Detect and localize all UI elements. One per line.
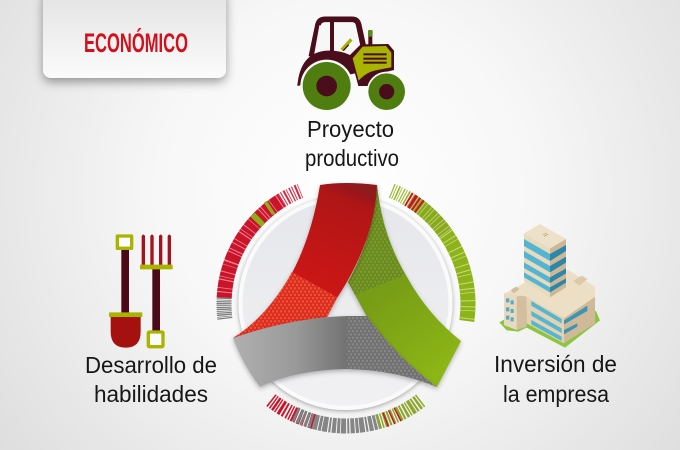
green hex section — [348, 185, 405, 295]
ribbon: gray — [233, 316, 437, 387]
label: Proyecto productivo — [305, 116, 399, 171]
gray hex section — [347, 316, 437, 387]
chart: triangular cycle — [224, 183, 468, 426]
ribbon: green — [348, 185, 461, 387]
icon: tractor — [297, 19, 407, 112]
label: Proyecto productivo: Proyecto — [307, 116, 394, 142]
label: Desarrollo de habilidades — [85, 352, 217, 407]
outer ring: gray stripes — [271, 400, 421, 426]
white disc — [240, 198, 450, 408]
heading: Económico: ECONÓMICO — [84, 27, 188, 58]
label: Inversión de la empresa: Inversión de — [494, 351, 617, 377]
label: Desarrollo de habilidades: habilidades — [94, 381, 208, 407]
icon: building — [499, 224, 600, 348]
label: Desarrollo de habilidades: Desarrollo de — [85, 352, 217, 378]
label: Proyecto productivo: productivo — [305, 145, 399, 171]
ribbon: red — [233, 183, 377, 338]
header card — [43, 0, 226, 78]
outer ring: green stripes — [392, 191, 468, 321]
red hex section — [233, 272, 337, 338]
outer ring: red stripes — [224, 191, 300, 319]
label: Inversión de la empresa — [494, 351, 617, 407]
label: Inversión de la empresa: la empresa — [503, 381, 609, 407]
icon: shovel and fork — [109, 234, 173, 348]
